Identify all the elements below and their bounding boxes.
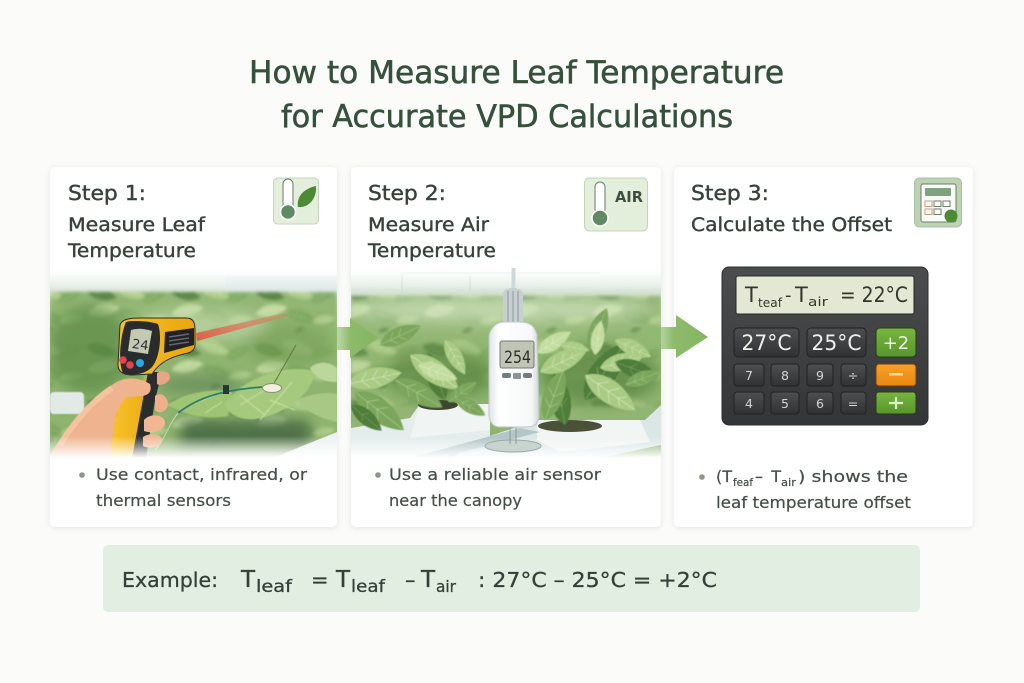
calculator keypad: 7 xyxy=(745,368,753,383)
infrared thermometer xyxy=(110,318,195,458)
callout: worked example: leaf xyxy=(256,577,293,597)
title xyxy=(249,55,784,135)
callout: worked example: T xyxy=(335,567,351,593)
calculator keypad: +2 xyxy=(883,333,909,354)
calculator keypad: 4 xyxy=(745,396,753,411)
step 1 bullet text xyxy=(79,465,307,510)
calculator keypad: 6 xyxy=(816,396,824,411)
step 1 heading: Measure Leaf xyxy=(68,215,206,236)
step 1 heading xyxy=(67,181,206,262)
step 3 bullet text: – T xyxy=(755,467,781,486)
step 3 bullet text: leaf temperature offset xyxy=(716,493,911,512)
calculator display: T xyxy=(794,283,808,307)
step 2 bullet text: Use a reliable air sensor xyxy=(389,465,601,484)
step 3 heading: Calculate the Offset xyxy=(691,215,892,236)
icon: thermometer air: AIR xyxy=(615,188,643,206)
step 3 bullet text: feaf xyxy=(733,477,753,489)
callout: worked example: Example: xyxy=(122,568,218,592)
air sensor device xyxy=(485,266,541,452)
step 3 bullet text: ) shows the xyxy=(798,467,908,486)
step 3 bullet text xyxy=(699,467,911,512)
icon: calculator with leaf xyxy=(914,178,962,227)
calculator keypad: 5 xyxy=(781,396,789,411)
step 1 heading: Temperature xyxy=(67,241,196,262)
callout: worked example xyxy=(103,545,920,612)
icon: red infrared beam xyxy=(196,313,288,341)
callout: worked example: : 27°C – 25°C = +2°C xyxy=(478,568,717,592)
callout: worked example: = xyxy=(311,568,329,592)
step 1 bullet text: Use contact, infrared, or xyxy=(96,465,307,484)
photo: greenhouse plants with air sensor xyxy=(346,266,663,458)
step 2 heading: Step 2: xyxy=(368,181,446,205)
title: How to Measure Leaf Temperature xyxy=(249,55,784,91)
callout: worked example: T xyxy=(420,567,436,593)
step 1 bullet text: thermal sensors xyxy=(96,491,231,510)
calculator display: teaf xyxy=(758,295,783,310)
arrow: step 1 to step 2 xyxy=(322,318,378,358)
calculator keypad: 8 xyxy=(781,368,789,383)
calculator keypad: 9 xyxy=(816,368,824,383)
step 2 heading: Temperature xyxy=(367,241,496,262)
arrow: step 2 to step 3 xyxy=(640,315,708,358)
callout: worked example: leaf xyxy=(351,577,386,597)
calculator keypad: ÷ xyxy=(848,368,858,383)
calculator display xyxy=(736,276,914,314)
infrared thermometer: 24 xyxy=(131,337,149,354)
calculator xyxy=(722,267,928,425)
callout: worked example: T xyxy=(240,567,256,593)
panel: step 3 calculate the offset xyxy=(674,167,973,527)
step 3 bullet text: (T xyxy=(716,467,732,486)
calculator display: T xyxy=(744,283,758,307)
calculator display: - xyxy=(785,285,792,306)
step 3 heading xyxy=(691,181,892,236)
step 2 heading xyxy=(367,181,496,262)
calculator keypad: 25°C xyxy=(812,331,862,355)
calculator keypad: = xyxy=(848,396,858,411)
icon: thermometer and leaf xyxy=(274,178,318,224)
step 3 heading: Step 3: xyxy=(691,181,769,205)
panel: step 1 measure leaf temperature xyxy=(48,167,337,527)
step 1 heading: Step 1: xyxy=(68,181,146,205)
panel: step 2 measure air temperature xyxy=(346,167,663,527)
step 3 bullet text: air xyxy=(781,477,797,489)
step 2 heading: Measure Air xyxy=(368,215,489,236)
calculator display: air xyxy=(808,294,829,309)
hydroponic channels xyxy=(351,404,490,458)
air sensor device: 254 xyxy=(504,348,531,368)
calculator keypad xyxy=(734,328,916,414)
callout: worked example: – xyxy=(405,568,416,592)
calculator display: = 22°C xyxy=(840,283,908,307)
step 2 bullet text: near the canopy xyxy=(389,491,522,510)
photo: greenhouse leaves with infrared thermometer xyxy=(48,268,337,458)
icon: thermometer air xyxy=(584,178,648,231)
hand gripping thermometer xyxy=(50,372,170,458)
title: for Accurate VPD Calculations xyxy=(281,99,733,135)
step 2 bullet text xyxy=(375,465,601,510)
calculator keypad: 27°C xyxy=(742,331,792,355)
callout: worked example: air xyxy=(436,577,456,596)
